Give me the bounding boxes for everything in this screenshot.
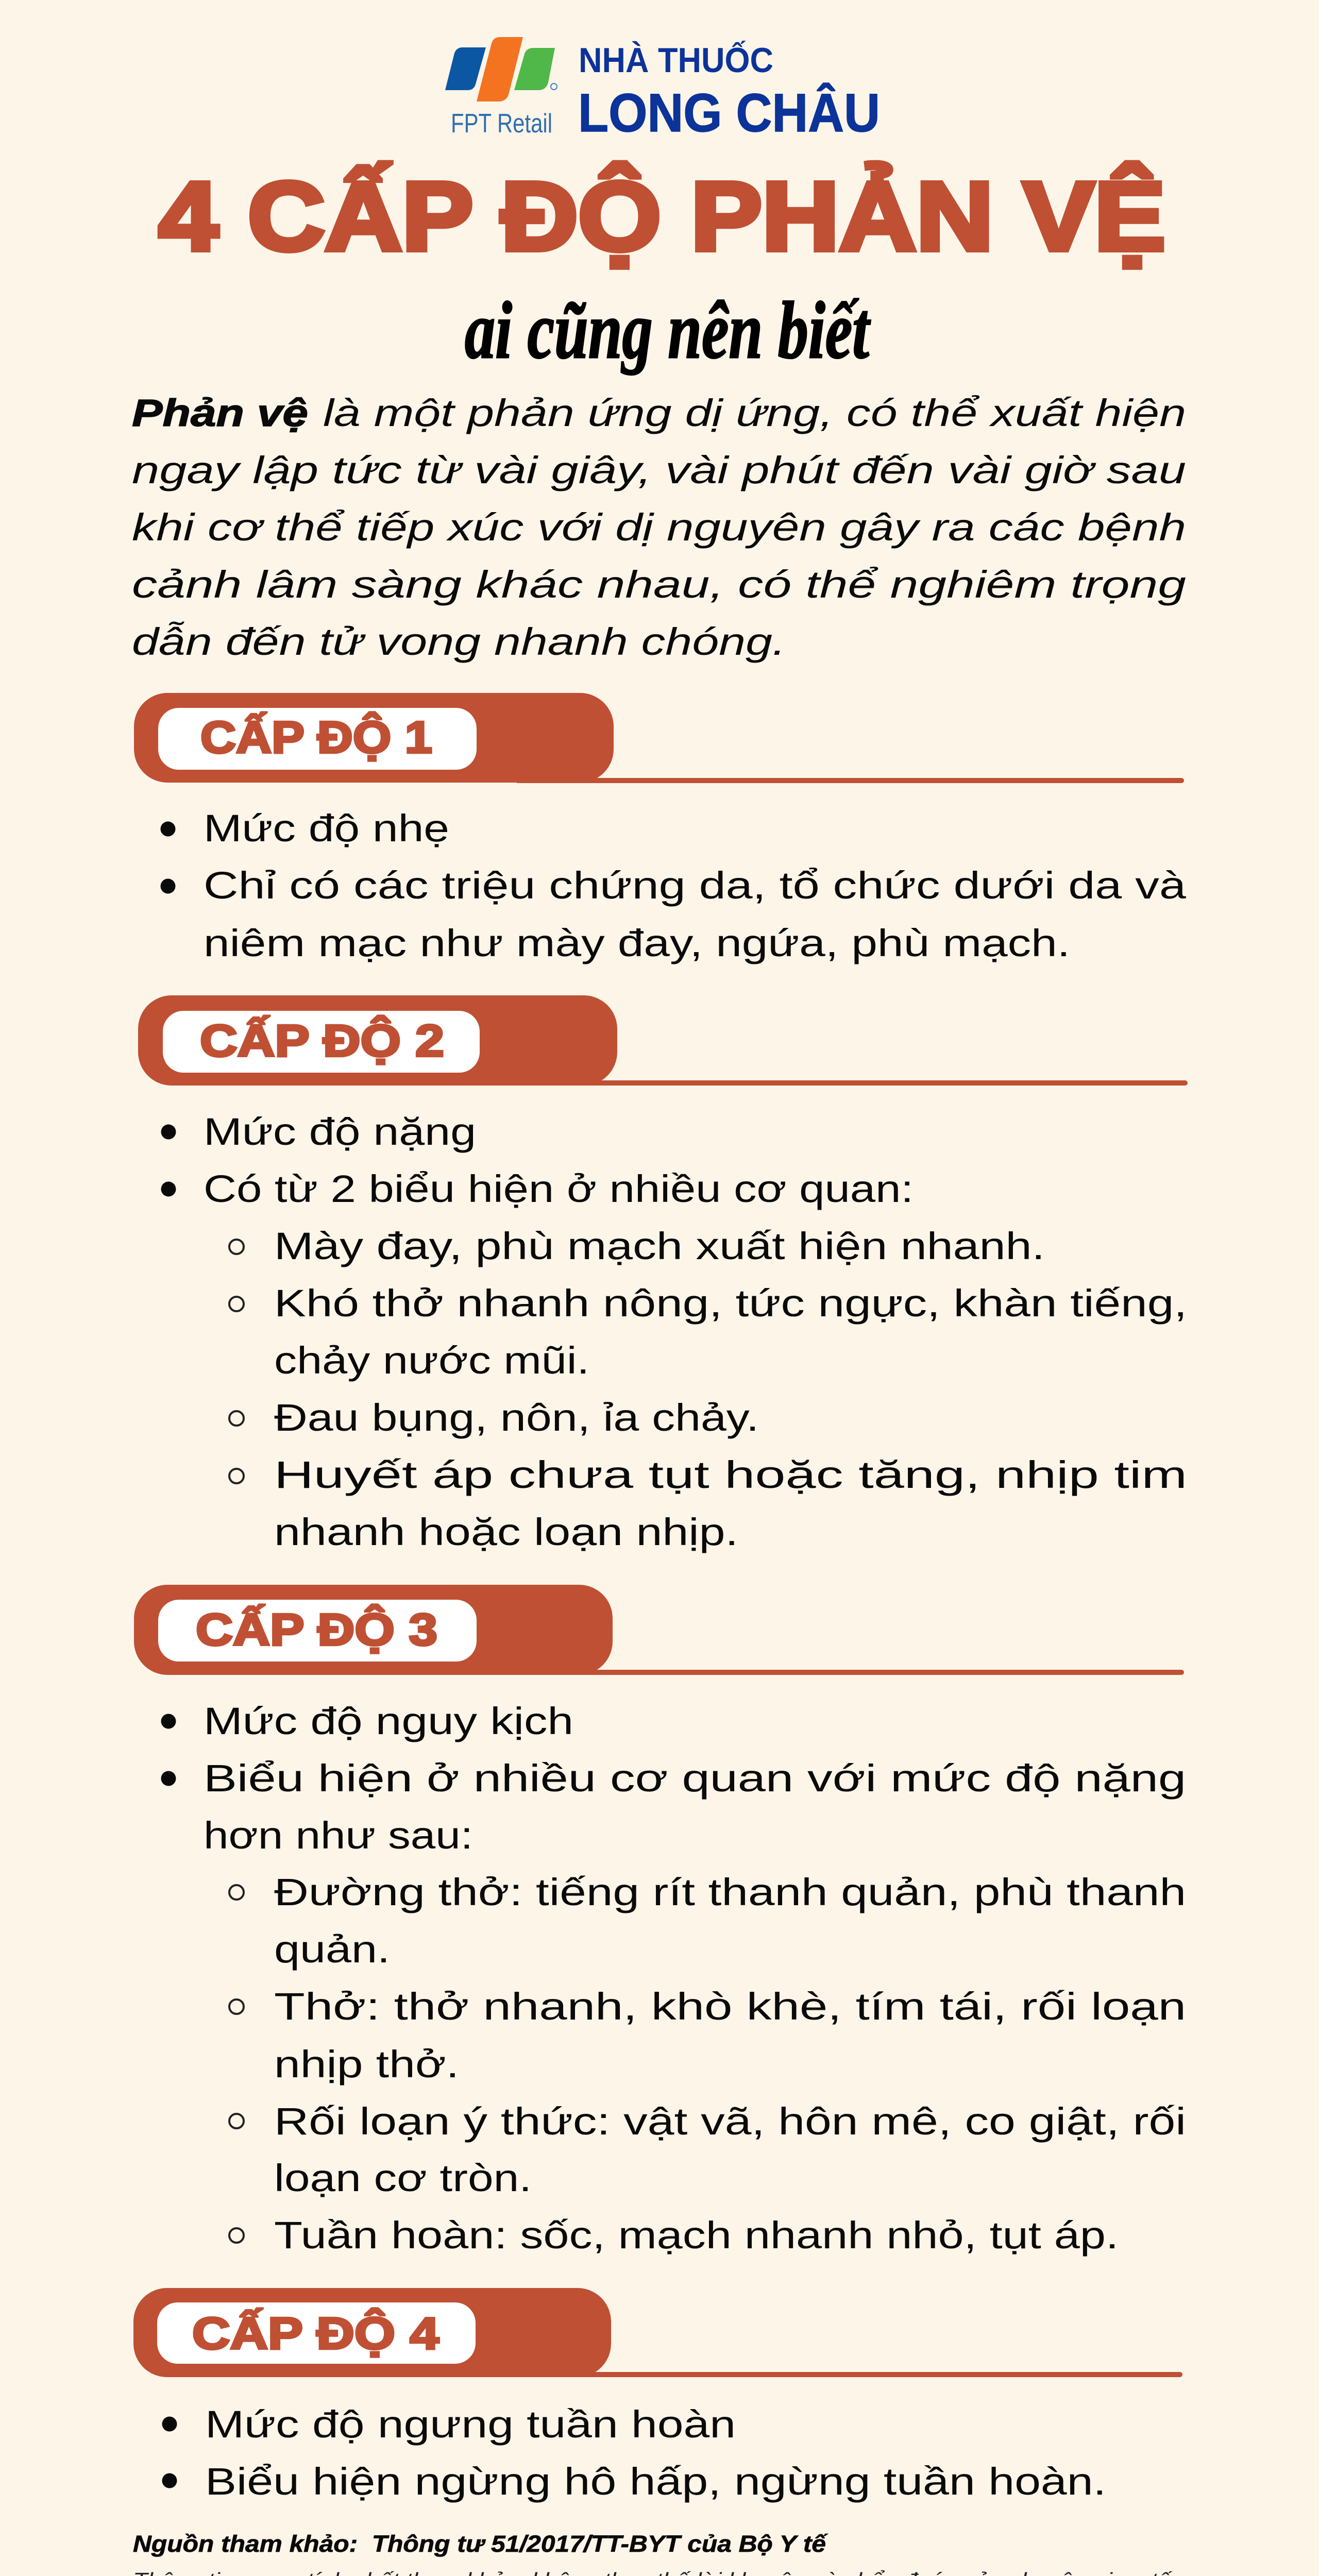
list: level 3 symptoms: Biểu hiện ở nhiều cơ quan với mức độ nặng (204, 1757, 1186, 1800)
title: 4 CẤP ĐỘ PHẢN VỆ (159, 162, 1165, 271)
intro paragraph: là một phản ứng dị ứng, có thể xuất hiện (323, 392, 1186, 434)
logo: FPT Retail Long Châu pharmacy (445, 37, 880, 143)
list: level 3 symptoms: hơn như sau: (204, 1814, 473, 1857)
banner: level 3: CẤP ĐỘ 3 (196, 1605, 437, 1655)
list: level 3 symptoms: Mức độ nguy kịch (204, 1700, 573, 1742)
list: level 2 symptoms: Có từ 2 biểu hiện ở nhiều cơ quan: (204, 1167, 914, 1210)
banner: level 4 (133, 2288, 1182, 2377)
list: level 4 symptoms: Mức độ ngưng tuần hoàn (205, 2403, 736, 2446)
list: level 3 symptoms: loạn cơ tròn. (274, 2157, 532, 2199)
intro paragraph: khi cơ thể tiếp xúc với dị nguyên gây ra các bệnh (132, 506, 1186, 549)
intro paragraph: Phản vệ (132, 392, 308, 434)
list: level 2 symptoms: chảy nước mũi. (274, 1339, 589, 1382)
source note: Nguồn tham khảo: Thông tư 51/2017/TT-BYT của Bộ Y tế (133, 2531, 828, 2557)
list: level 3 symptoms: Thở: thở nhanh, khò khè, tím tái, rối loạn (274, 1985, 1186, 2028)
list: level 1 symptoms: Mức độ nhẹ (204, 807, 449, 850)
list: level 2 symptoms: nhanh hoặc loạn nhịp. (274, 1511, 738, 1553)
list: level 1 symptoms (161, 807, 1187, 964)
subtitle: ai cũng nên biết (465, 285, 871, 376)
list: level 2 symptoms: Mức độ nặng (204, 1110, 476, 1153)
banner: level 2: CẤP ĐỘ 2 (200, 1016, 444, 1066)
panel: level 2 (138, 995, 1188, 1553)
panel: level 4 (133, 2288, 1182, 2503)
intro paragraph: ngay lập tức từ vài giây, vài phút đến vài giờ sau (132, 449, 1186, 492)
list: level 4 symptoms (162, 2403, 1106, 2503)
list: level 3 symptoms: Rối loạn ý thức: vật vã, hôn mê, co giật, rối (274, 2100, 1186, 2143)
banner: level 1 (134, 693, 1184, 783)
panel: level 3 (134, 1585, 1186, 2257)
intro paragraph: dẫn đến tử vong nhanh chóng. (132, 620, 786, 663)
icon: FPT three-colour mark (445, 37, 557, 101)
intro paragraph (132, 392, 1186, 663)
intro paragraph: cảnh lâm sàng khác nhau, có thể nghiêm trọng (132, 563, 1186, 606)
list: level 2 symptoms: Khó thở nhanh nông, tức ngực, khàn tiếng, (274, 1282, 1187, 1325)
list: level 3 symptoms: quản. (274, 1928, 390, 1971)
banner: level 4: CẤP ĐỘ 4 (192, 2309, 439, 2359)
panel: level 1 (134, 693, 1187, 964)
list: level 3 symptoms: Đường thở: tiếng rít thanh quản, phù thanh (274, 1871, 1186, 1913)
list: level 3 symptoms: nhịp thở. (274, 2043, 459, 2086)
banner: level 2 (138, 995, 1188, 1086)
list: level 3 symptoms: Tuần hoàn: sốc, mạch nhanh nhỏ, tụt áp. (274, 2214, 1119, 2257)
list: level 1 symptoms: Chỉ có các triệu chứng da, tổ chức dưới da và (204, 864, 1187, 907)
banner: level 3 (134, 1585, 1184, 1675)
list: level 4 symptoms: Biểu hiện ngừng hô hấp, ngừng tuần hoàn. (205, 2460, 1106, 2503)
list: level 2 symptoms: Mày đay, phù mạch xuất hiện nhanh. (274, 1225, 1045, 1267)
banner: level 1: CẤP ĐỘ 1 (200, 713, 432, 762)
list: level 2 symptoms (161, 1110, 1187, 1553)
logo caption: FPT Retail: FPT Retail (451, 109, 552, 139)
list: level 1 symptoms: niêm mạc như mày đay, ngứa, phù mạch. (204, 922, 1070, 964)
list: level 3 symptoms (161, 1700, 1186, 2257)
logo text: Nhà Thuốc: NHÀ THUỐC (579, 40, 773, 80)
list: level 2 symptoms: Huyết áp chưa tụt hoặc tăng, nhịp tim (274, 1453, 1187, 1496)
list: level 2 symptoms: Đau bụng, nôn, ỉa chảy. (274, 1396, 759, 1439)
logo text: Long Châu: LONG CHÂU (578, 82, 880, 143)
